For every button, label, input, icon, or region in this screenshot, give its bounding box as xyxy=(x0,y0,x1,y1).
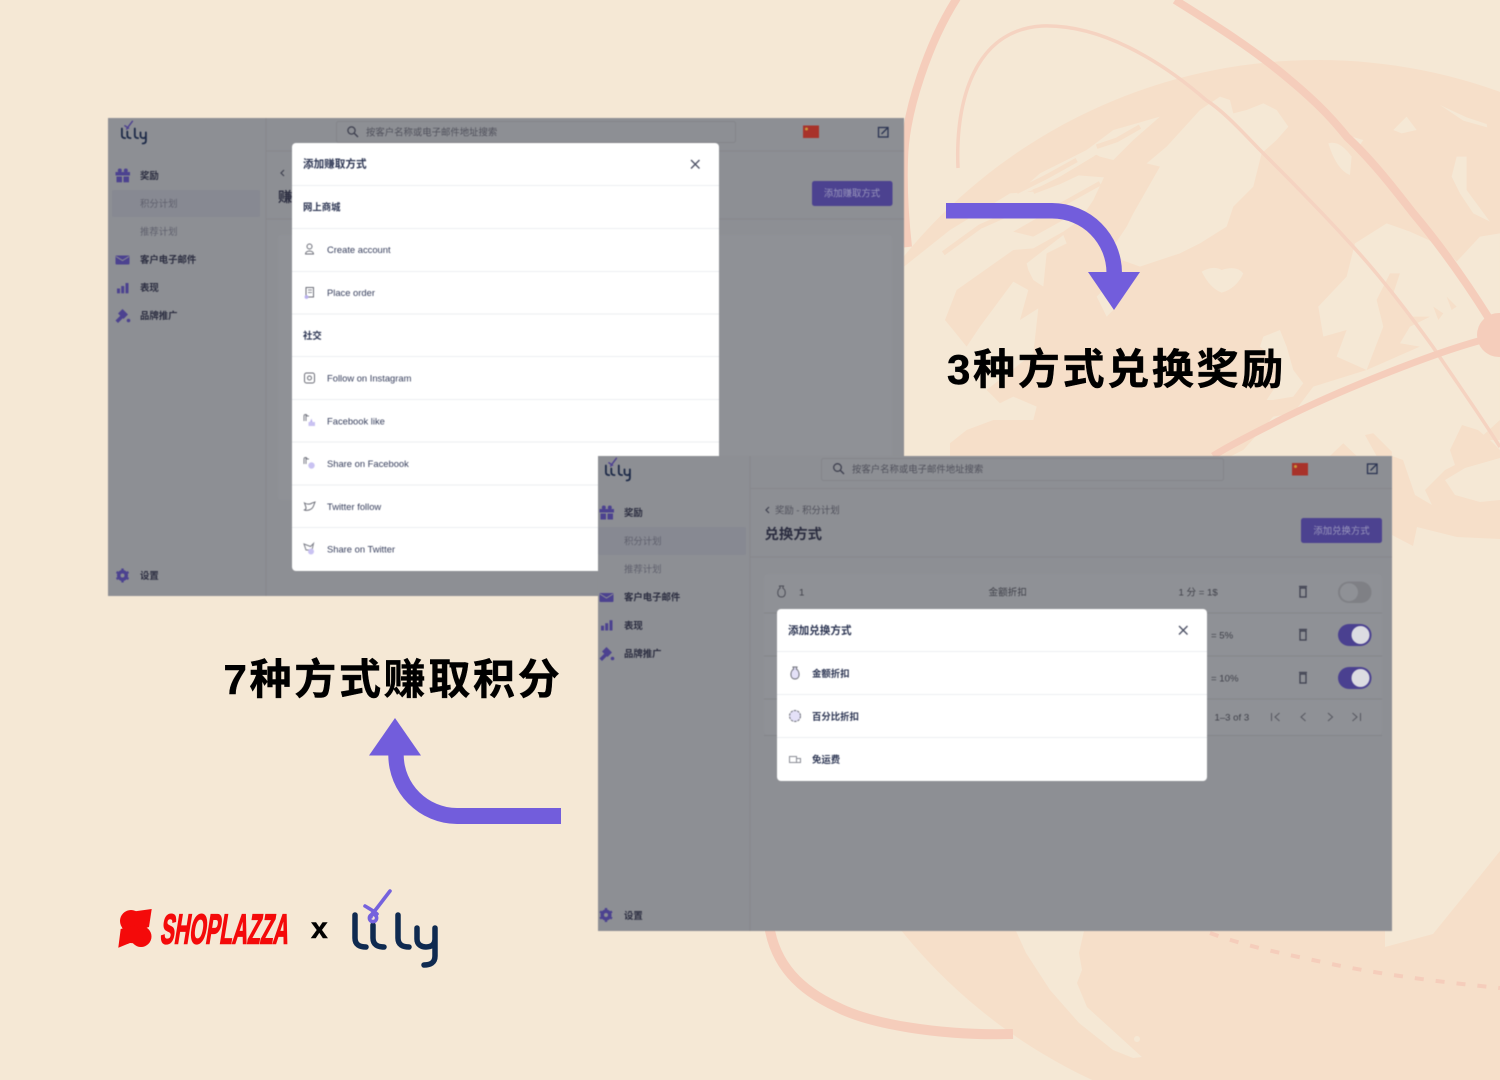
logo lockup xyxy=(118,891,435,965)
nav: rewards: 奖励 xyxy=(140,170,159,181)
row: free shipping: 免运费 xyxy=(812,754,841,765)
arrow: to redeem heading xyxy=(946,203,1140,310)
row 1: 金额折扣 xyxy=(988,586,1027,598)
list card xyxy=(278,235,892,500)
search box xyxy=(822,458,1224,480)
icon: close xyxy=(691,160,700,168)
flag xyxy=(1292,463,1308,476)
icon: hammer xyxy=(600,647,614,661)
header and sidebar rules xyxy=(266,118,904,596)
row: facebook like: Facebook like xyxy=(327,416,385,426)
row: percent discount xyxy=(790,710,859,722)
panel: redeem rewards screenshot xyxy=(598,456,1392,931)
nav: rewards: 奖励 xyxy=(624,507,643,518)
page title fragment: 赚 xyxy=(278,189,292,206)
flag xyxy=(803,126,819,138)
nav: performance: 表现 xyxy=(140,282,159,293)
toggle off xyxy=(1338,582,1372,603)
row: instagram: Follow on Instagram xyxy=(327,372,412,384)
row: create account: Create account xyxy=(327,244,391,255)
pagination xyxy=(1214,712,1360,724)
icon: hammer xyxy=(116,309,130,323)
logo: lily small xyxy=(606,458,630,480)
land masses xyxy=(904,97,1500,1058)
icon: gift xyxy=(116,168,130,182)
nav: points program: 积分计划 xyxy=(624,536,662,546)
icon: bars xyxy=(601,620,612,630)
row: share on twitter: Share on Twitter xyxy=(327,544,395,554)
icon: trash 1 xyxy=(1299,586,1307,597)
button: add redemption method: 添加兑换方式 xyxy=(1313,525,1370,536)
icon: open external xyxy=(878,128,888,137)
panel background xyxy=(108,118,904,596)
row 1: 1 分 = 1$ xyxy=(1178,588,1218,598)
logo: lily xyxy=(355,891,435,965)
modal: add redemption method xyxy=(777,609,1207,781)
panel: earn points screenshot xyxy=(108,118,904,596)
nav: customer email: 客户电子邮件 xyxy=(140,254,197,265)
table card xyxy=(764,574,1382,736)
arrow: to earn heading xyxy=(369,718,561,824)
nav: brand promotion: 品牌推广 xyxy=(140,310,178,321)
logo: lily small xyxy=(122,121,146,144)
icon: gift xyxy=(600,506,614,520)
button: add redemption method xyxy=(1301,518,1382,543)
row: share on facebook: Share on Facebook xyxy=(327,458,409,469)
nav: settings: 设置 xyxy=(624,910,643,921)
button: add earn method xyxy=(812,181,892,206)
heading: earn: 7种方式赚取积分 xyxy=(224,656,562,703)
row 1: 1 xyxy=(799,588,804,598)
row 3 value: = 10% xyxy=(1211,674,1239,684)
toggle on 3 xyxy=(1338,667,1372,689)
button: add earn method: 添加赚取方式 xyxy=(824,188,881,198)
row: place order xyxy=(305,287,375,299)
icon: gear xyxy=(600,908,612,922)
row dividers xyxy=(292,186,719,528)
modal: add earn method xyxy=(292,143,719,571)
logo: shoplazza mark xyxy=(118,909,152,948)
section: online store: 网上商城 xyxy=(303,202,341,212)
row: facebook like xyxy=(304,414,385,426)
search box xyxy=(336,122,736,142)
panel background xyxy=(598,456,1392,931)
section: social: 社交 xyxy=(303,330,322,341)
row: twitter follow: Twitter follow xyxy=(327,501,381,512)
icon: mail xyxy=(116,256,130,264)
nav: referral program: 推荐计划 xyxy=(624,564,662,574)
nav: performance: 表现 xyxy=(624,620,643,631)
page title: 兑换方式 xyxy=(764,525,823,543)
flight arcs xyxy=(769,0,1500,1034)
row: percent discount: 百分比折扣 xyxy=(812,711,859,722)
row: free shipping xyxy=(790,754,841,765)
globe disc xyxy=(783,60,1500,1080)
row: amount discount: 金额折扣 xyxy=(812,668,850,679)
icon: trash 2 xyxy=(1299,630,1307,640)
icon: close xyxy=(1179,626,1188,634)
icon: trash 3 xyxy=(1299,672,1307,683)
nav: customer email: 客户电子邮件 xyxy=(624,592,681,602)
toggle on 2 xyxy=(1338,624,1372,646)
row 1 xyxy=(778,586,1218,598)
header and sidebar rules xyxy=(750,456,1392,931)
times sign: x xyxy=(311,912,328,945)
row 2 value: = 5% xyxy=(1211,630,1234,642)
row: amount discount xyxy=(791,667,850,679)
nav: points program: 积分计划 xyxy=(140,198,178,209)
breadcrumb: 奖励 - 积分计划 xyxy=(775,504,840,516)
nav: referral program: 推荐计划 xyxy=(140,226,178,237)
row dividers xyxy=(777,652,1207,738)
row: place order: Place order xyxy=(327,287,375,298)
modal title: 添加赚取方式 xyxy=(303,158,367,170)
icon: open external xyxy=(1368,464,1377,474)
icon: gear xyxy=(116,568,128,582)
modal title: 添加兑换方式 xyxy=(788,624,852,637)
node xyxy=(1477,313,1500,357)
icon: mail xyxy=(600,593,614,602)
heading: redeem: 3种方式兑换奖励 xyxy=(947,346,1286,393)
sidebar highlight xyxy=(112,190,260,217)
search box: 按客户名称或电子邮件地址搜索 xyxy=(366,126,497,138)
pagination: 1–3 of 3 xyxy=(1214,712,1249,724)
globe illustration xyxy=(769,0,1500,1080)
nav: brand promotion: 品牌推广 xyxy=(624,648,662,659)
sidebar highlight xyxy=(598,527,746,555)
logo: shoplazza wordmark: SHOPLAZZA xyxy=(158,906,293,952)
search box: 按客户名称或电子邮件地址搜索 xyxy=(852,464,983,474)
nav: settings: 设置 xyxy=(140,570,159,581)
icon: bars xyxy=(117,283,128,293)
breadcrumb chevron xyxy=(281,170,284,176)
